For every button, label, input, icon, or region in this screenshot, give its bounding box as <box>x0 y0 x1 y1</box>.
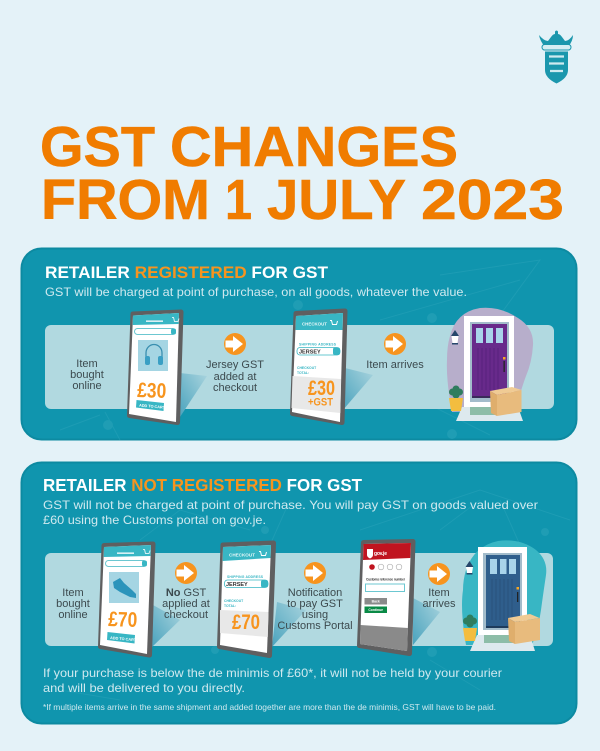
text: item arrives: Item arrives <box>366 359 424 371</box>
phone: checkout page: TOTAL: <box>297 371 309 375</box>
text: item bought online: bought <box>70 369 104 381</box>
light process band <box>45 325 554 409</box>
heading: RETAILER NOT REGISTERED FOR GST <box>43 475 362 495</box>
shadow: phone four <box>272 602 306 647</box>
description: GST will not be charged at point of purchase. You will pay GST on goods valued over <box>43 498 538 512</box>
shadow: phone five <box>413 598 440 645</box>
phone: checkout page: +GST <box>308 396 333 408</box>
panel: retailer not registered <box>22 462 576 724</box>
text: Jersey GST added at checkout: Jersey GST <box>206 359 264 371</box>
icon: headphones <box>145 344 163 365</box>
text: Jersey GST added at checkout: checkout <box>213 382 257 394</box>
text: no GST applied at checkout: applied at <box>162 598 210 610</box>
title: 2023 <box>421 168 564 232</box>
text: item bought online: Item <box>76 358 98 370</box>
shadow: phone one <box>180 373 207 417</box>
panel: retailer registered <box>22 248 576 440</box>
phone: product page: ADD TO CART <box>110 636 137 642</box>
phone: checkout page: CHECKOUT <box>224 599 244 603</box>
phone: product page <box>129 312 181 422</box>
text: notification to pay GST: Customs Portal <box>277 620 353 632</box>
title: 1 <box>225 168 252 232</box>
heading: RETAILER REGISTERED FOR GST <box>45 263 329 282</box>
phone: checkout page <box>220 543 274 656</box>
arrow: step three <box>428 563 450 585</box>
phone: checkout page: JERSEY <box>299 350 321 356</box>
text: item bought online: online <box>72 380 102 392</box>
text: item arrives: Item <box>428 587 450 599</box>
phone: customs portal: gov.je <box>374 551 387 557</box>
phone: product page: £70 <box>108 608 138 632</box>
de minimis note: and will be delivered to you directly. <box>43 681 245 695</box>
text: item bought online: bought <box>56 598 90 610</box>
text: notification to pay GST: using <box>302 609 328 621</box>
phone: product page: ADD TO CART <box>139 404 166 410</box>
icon: trainer <box>113 578 136 598</box>
phone: checkout page: CHECKOUT <box>297 366 317 370</box>
title: JULY <box>267 168 406 232</box>
text: no GST applied at checkout: checkout <box>164 609 208 621</box>
arrow: step one <box>175 562 197 584</box>
description: GST will be charged at point of purchase, on all goods, whatever the value. <box>45 285 467 299</box>
shadow: phone two <box>343 368 373 410</box>
title: FROM <box>41 168 210 232</box>
phone: checkout page: TOTAL: <box>224 604 236 608</box>
text: notification to pay GST: Notification <box>288 587 342 599</box>
illustration: blue door with parcel <box>462 540 546 651</box>
footnote: *If multiple items arrive in the same shipment and added together are more than the de minimis, GST will have to be paid. <box>43 702 496 712</box>
phone: product page <box>100 544 153 655</box>
phone: customs portal: Continue <box>368 608 383 612</box>
phone: customs portal: Customs reference number <box>366 578 406 582</box>
phone: checkout page: £30 <box>308 377 335 400</box>
phone: checkout page: £70 <box>232 611 260 634</box>
arrow: step one <box>224 333 246 355</box>
title: GST <box>40 115 155 179</box>
title <box>40 115 564 232</box>
text: item bought online: online <box>58 609 88 621</box>
de minimis note: If your purchase is below the de minimis of £60*, it will not be held by your courier <box>43 666 502 680</box>
phone: checkout page <box>292 311 345 422</box>
phone: customs portal: Back <box>372 600 380 604</box>
phone: checkout page: SHIPPING ADDRESS <box>299 342 337 346</box>
text: notification to pay GST: to pay GST <box>287 598 343 610</box>
phone: checkout page: CHECKOUT <box>302 322 327 328</box>
text: no GST applied at checkout: No GST <box>166 587 206 599</box>
light process band <box>45 553 553 646</box>
shadow: phone three <box>152 605 180 647</box>
description: £60 using the Customs portal on gov.je. <box>43 513 266 527</box>
text: Jersey GST added at checkout: added at <box>214 371 256 383</box>
title: CHANGES <box>170 115 458 179</box>
phone: product page: £30 <box>137 379 167 403</box>
arrow: step two <box>304 562 326 584</box>
phone: checkout page: SHIPPING ADDRESS <box>227 575 264 579</box>
phone: checkout page: JERSEY <box>226 582 248 588</box>
phone: checkout page: CHECKOUT <box>229 552 255 558</box>
arrow: step two <box>384 333 406 355</box>
illustration: purple door with parcel <box>447 308 533 421</box>
icon: Jersey crest <box>539 30 573 84</box>
text: item bought online: Item <box>62 587 84 599</box>
text: item arrives: arrives <box>422 598 456 610</box>
phone: customs portal <box>360 542 413 654</box>
